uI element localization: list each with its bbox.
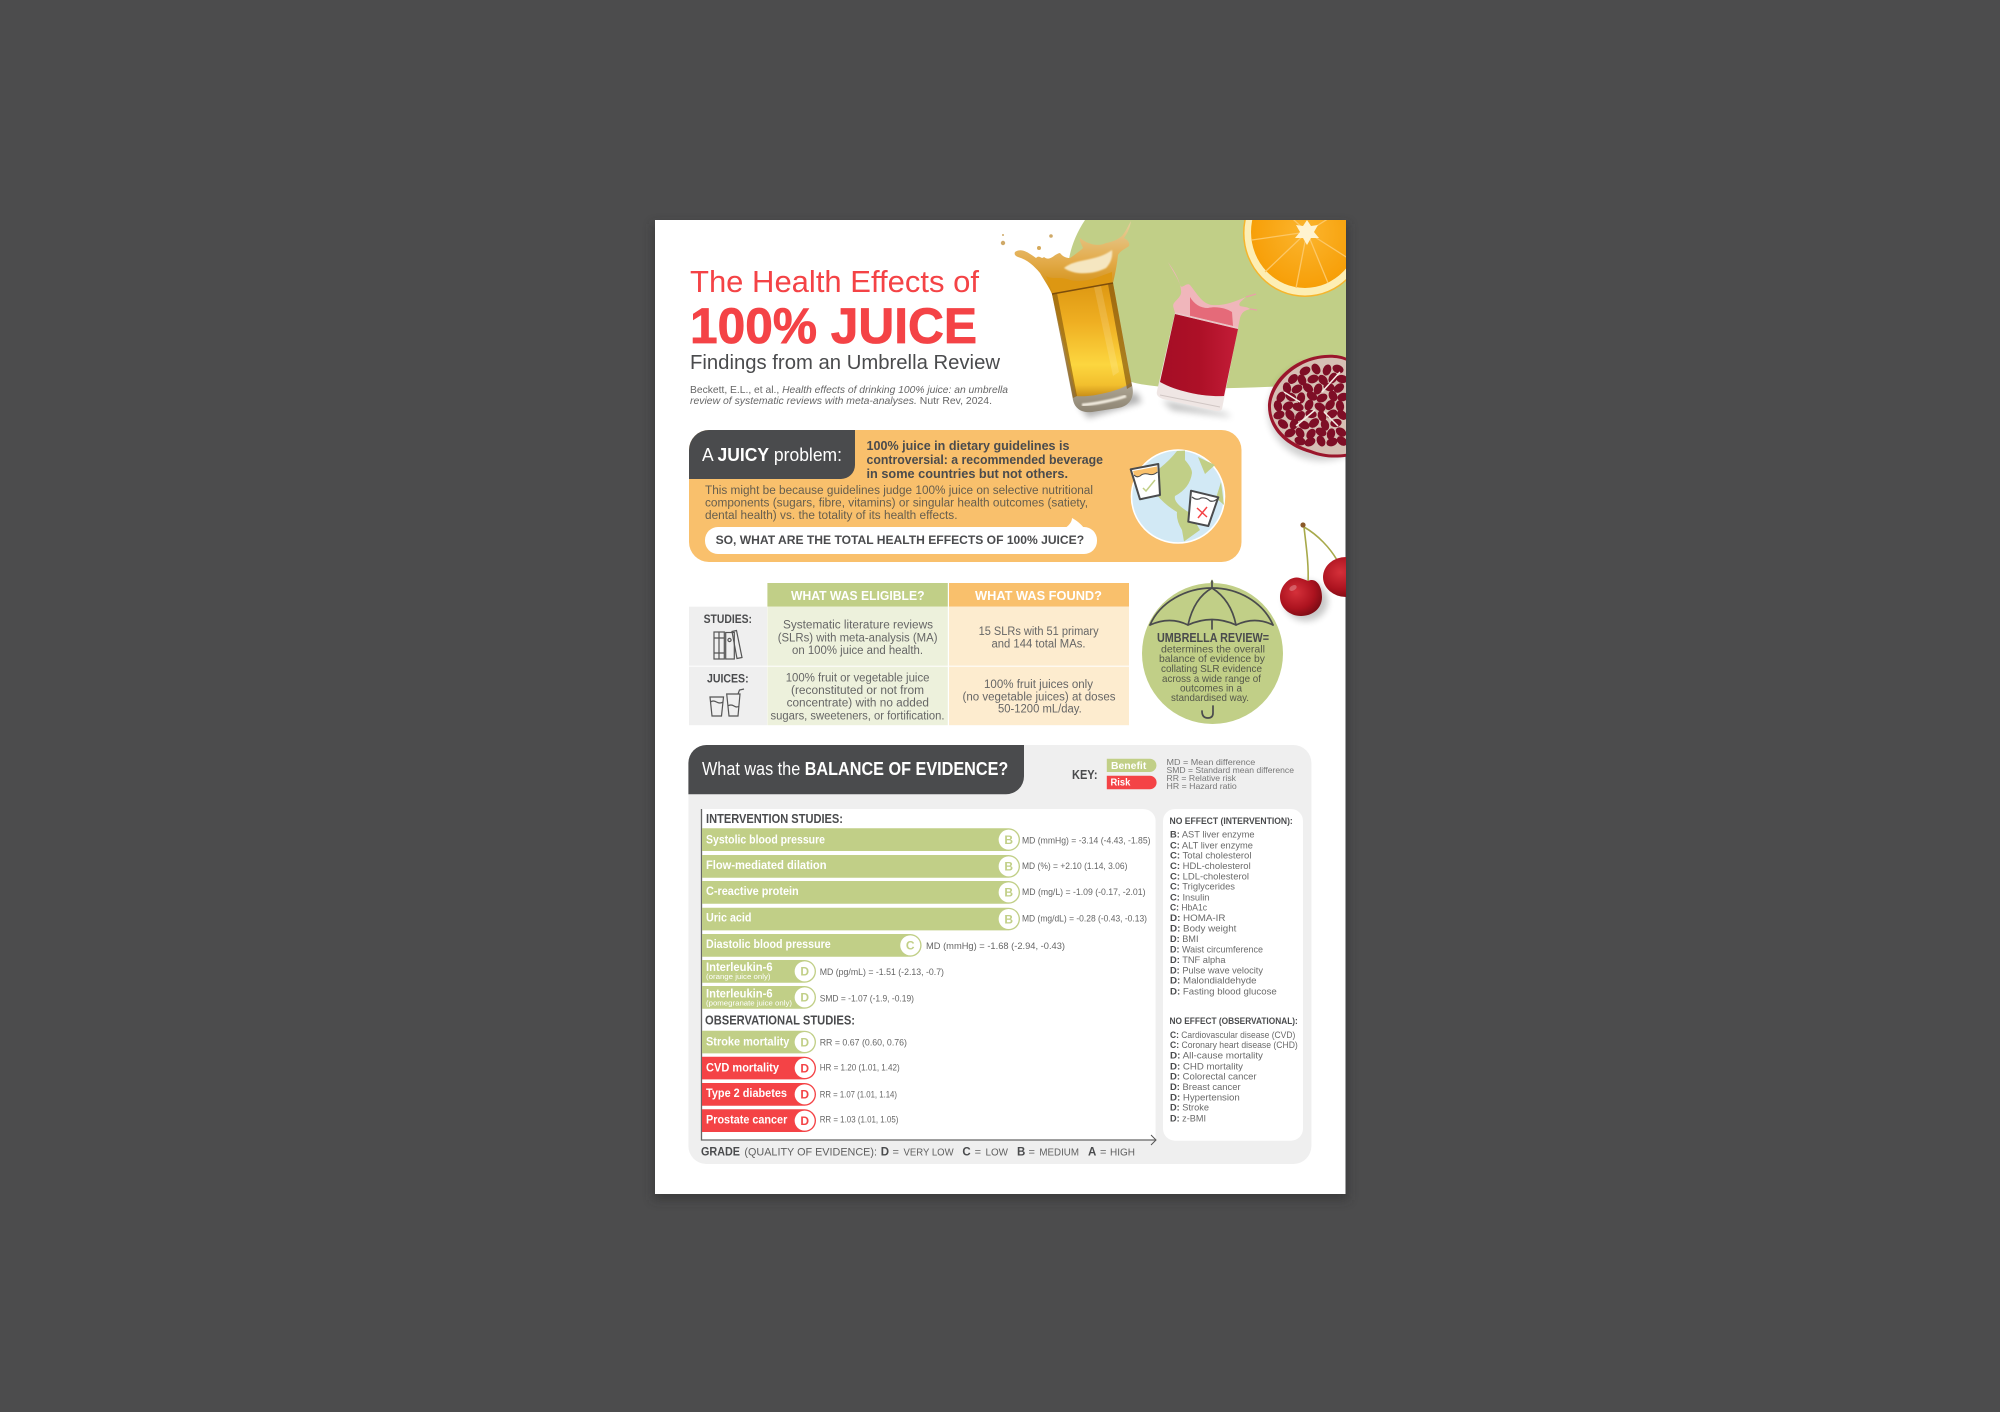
key statement: controversial: a recommended beverage <box>866 452 1103 467</box>
grade legend: MEDIUM <box>1039 1147 1079 1159</box>
grade legend: = <box>1028 1147 1035 1159</box>
bar: uric acid <box>702 908 1147 930</box>
hero artwork: juice and fruit <box>1001 169 1376 621</box>
cell: found juices <box>949 667 1129 725</box>
list: no effect intervention: NO EFFECT (INTERVENTION): <box>1170 816 1293 827</box>
explanation <box>705 485 1093 522</box>
key: Benefit <box>1111 760 1147 772</box>
list: no effect intervention: C: ALT liver enzyme <box>1170 840 1253 851</box>
cell: found studies <box>949 607 1129 666</box>
list: no effect intervention: D: Malondialdehyde <box>1170 976 1257 987</box>
key: HR = Hazard ratio <box>1166 781 1237 791</box>
cell: eligible juices <box>767 667 948 725</box>
umbrella definition: determines the overall <box>1161 643 1265 655</box>
cell: eligible studies: on 100% juice and health. <box>792 645 923 657</box>
green background blob <box>1067 220 1346 388</box>
bar: systolic: B <box>1004 833 1013 847</box>
citation: Beckett, E.L., et al., Health effects of drinking 100% juice: an umbrella <box>690 384 1008 396</box>
explanation: This might be because guidelines judge 100% juice on selective nutritional <box>705 485 1093 497</box>
umbrella definition: across a wide range of <box>1162 673 1261 685</box>
list: no effect intervention: D: Waist circumference <box>1170 944 1263 955</box>
grade legend: C <box>962 1147 971 1159</box>
umbrella definition: standardised way. <box>1171 692 1249 704</box>
bar: cvd mortality <box>702 1057 900 1079</box>
yellow juice glass <box>1001 221 1142 418</box>
header: eligible: WHAT WAS ELIGIBLE? <box>791 588 925 603</box>
bar: type 2 diabetes: Type 2 diabetes <box>706 1088 787 1100</box>
key: SMD = Standard mean difference <box>1166 765 1294 775</box>
orange slice <box>1243 220 1346 297</box>
cell: eligible studies <box>767 607 948 666</box>
subtitle: Findings from an Umbrella Review <box>690 352 1001 374</box>
bar: interleukin-6 pomegranate <box>702 986 914 1009</box>
list: no effect observational: D: z-BMI <box>1170 1113 1206 1124</box>
question bubble <box>705 518 1097 554</box>
grade legend: = <box>975 1147 981 1159</box>
list: no effect intervention: C: Insulin <box>1170 892 1210 903</box>
explanation: components (sugars, fibre, vitamins) or singular health outcomes (satiety, <box>705 498 1088 510</box>
bar: flow-mediated dilation: B <box>1004 860 1013 874</box>
bar: uric acid: B <box>1004 912 1013 926</box>
bar: interleukin-6 orange <box>702 960 944 983</box>
panel: juicy problem <box>689 430 1242 562</box>
cell: found juices: (no vegetable juices) at doses <box>962 691 1116 703</box>
row label: studies <box>689 607 767 666</box>
umbrella definition: UMBRELLA REVIEW= <box>1157 631 1269 645</box>
list: no effect intervention: D: TNF alpha <box>1170 955 1226 966</box>
list: no effect intervention: D: Fasting blood glucose <box>1170 986 1277 997</box>
heading text: What was the BALANCE OF EVIDENCE? <box>702 759 1008 779</box>
bar: stroke mortality: D <box>800 1035 809 1049</box>
header: eligible <box>767 583 948 607</box>
heading tab <box>689 430 855 479</box>
bar: prostate cancer: D <box>800 1114 809 1128</box>
list: no effect intervention: C: Total cholesterol <box>1170 850 1252 861</box>
bar: stroke mortality <box>702 1031 907 1053</box>
bar: diastolic: C <box>906 939 915 953</box>
list: no effect observational: NO EFFECT (OBSERVATIONAL): <box>1170 1016 1298 1027</box>
bar: diastolic: MD (mmHg) = -1.68 (-2.94, -0.43) <box>926 941 1065 952</box>
page shadow <box>653 224 1348 1200</box>
list: no effect intervention: D: HOMA-IR <box>1170 913 1226 924</box>
panel: umbrella review <box>1142 579 1283 724</box>
list: no effect observational: D: Colorectal cancer <box>1170 1071 1257 1082</box>
cell: found juices: 100% fruit juices only <box>984 679 1093 691</box>
title line 1: The Health Effects of <box>690 264 979 299</box>
list: no effect intervention: C: HbA1c <box>1170 902 1207 913</box>
heading: intervention: INTERVENTION STUDIES: <box>706 812 843 826</box>
list: no effect intervention: B: AST liver enzyme <box>1170 830 1254 841</box>
bar: c-reactive protein: MD (mg/L) = -1.09 (-0.17, -2.01) <box>1022 887 1146 898</box>
list: no effect observational: C: Coronary heart disease (CHD) <box>1170 1040 1298 1051</box>
row label: studies: STUDIES: <box>704 614 752 626</box>
bar: systolic: Systolic blood pressure <box>706 835 825 847</box>
title line 2: 100% JUICE <box>690 298 977 354</box>
grade legend: LOW <box>986 1147 1008 1159</box>
cell: eligible juices: concentrate) with no added <box>787 698 929 710</box>
bar: prostate cancer: RR = 1.03 (1.01, 1.05) <box>820 1115 898 1126</box>
bar: cvd mortality: HR = 1.20 (1.01, 1.42) <box>820 1063 900 1074</box>
icon: globe with glasses <box>1131 450 1224 543</box>
grade legend: = <box>892 1147 899 1159</box>
bar: interleukin-6 pomegranate: D <box>800 991 809 1005</box>
key: RR = Relative risk <box>1166 773 1237 783</box>
umbrella definition: outcomes in a <box>1180 683 1242 695</box>
grade legend: B <box>1017 1147 1025 1159</box>
cell: found studies: and 144 total MAs. <box>992 638 1086 650</box>
page sheet <box>655 220 1346 1194</box>
bar: type 2 diabetes: D <box>800 1088 809 1102</box>
bar: stroke mortality: Stroke mortality <box>706 1037 790 1049</box>
list: no effect intervention: D: Pulse wave velocity <box>1170 965 1263 976</box>
umbrella definition <box>1157 631 1269 704</box>
heading tab <box>688 745 1024 794</box>
list: no effect observational <box>1170 1016 1298 1124</box>
list: no effect observational: D: All-cause mortality <box>1170 1051 1263 1062</box>
key: Risk <box>1110 777 1130 789</box>
bar: cvd mortality: CVD mortality <box>706 1063 780 1075</box>
list: no effect intervention: C: Triglycerides <box>1170 882 1235 893</box>
bar: prostate cancer <box>702 1109 898 1132</box>
citation <box>690 384 1008 407</box>
bar: flow-mediated dilation: MD (%) = +2.10 (1.14, 3.06) <box>1022 861 1127 872</box>
list: no effect observational: C: Cardiovascular disease (CVD) <box>1170 1030 1295 1041</box>
list: no effect observational: D: CHD mortality <box>1170 1061 1243 1072</box>
bar: interleukin-6 pomegranate: Interleukin-6 <box>706 989 773 1001</box>
bar: type 2 diabetes: RR = 1.07 (1.01, 1.14) <box>820 1089 897 1100</box>
grade legend: D <box>881 1147 889 1159</box>
heading: observational: OBSERVATIONAL STUDIES: <box>705 1013 855 1027</box>
icon: glasses <box>710 689 744 716</box>
bar: systolic: MD (mmHg) = -3.14 (-4.43, -1.85) <box>1022 835 1150 846</box>
bar: prostate cancer: Prostate cancer <box>706 1114 788 1126</box>
cell: eligible juices: (reconstituted or not from <box>791 685 924 697</box>
question bubble: SO, WHAT ARE THE TOTAL HEALTH EFFECTS OF 100% JUICE? <box>716 533 1084 547</box>
list: no effect intervention: D: BMI <box>1170 934 1198 945</box>
cherries <box>1280 522 1346 624</box>
key statement: 100% juice in dietary guidelines is <box>866 438 1070 453</box>
bar: flow-mediated dilation <box>702 855 1127 878</box>
pomegranate <box>1265 354 1346 464</box>
icon: books <box>714 630 742 659</box>
list: no effect observational: D: Stroke <box>1170 1103 1209 1114</box>
bar: uric acid: Uric acid <box>706 913 752 925</box>
list: no effect intervention <box>1170 816 1293 997</box>
cell: found juices: 50-1200 mL/day. <box>998 704 1082 716</box>
explanation: dental health) vs. the totality of its health effects. <box>705 510 958 522</box>
grade legend: GRADE <box>701 1147 740 1159</box>
chart: effect bars <box>701 809 1156 1145</box>
bar: diastolic: Diastolic blood pressure <box>706 939 831 951</box>
bar: systolic <box>702 828 1150 851</box>
grade legend: VERY LOW <box>904 1147 954 1159</box>
list: no effect intervention: D: Body weight <box>1170 924 1237 935</box>
bar: interleukin-6 orange: (orange juice only) <box>706 974 770 981</box>
red juice glass <box>1157 262 1257 417</box>
grade legend: A <box>1088 1147 1096 1159</box>
row label: juices: JUICES: <box>707 674 749 686</box>
bar: c-reactive protein <box>702 881 1146 904</box>
row label: juices <box>689 667 767 725</box>
list: no effect intervention: C: LDL-cholesterol <box>1170 871 1249 882</box>
cell: eligible juices: 100% fruit or vegetable juice <box>786 673 930 685</box>
grade legend <box>701 1147 1135 1159</box>
grade legend: (QUALITY OF EVIDENCE): <box>744 1147 877 1159</box>
list: no effect observational: D: Hypertension <box>1170 1092 1240 1103</box>
heading text: A JUICY problem: <box>702 445 842 465</box>
key: MD = Mean difference <box>1166 757 1256 767</box>
umbrella definition: collating SLR evidence <box>1161 663 1262 675</box>
cell: found studies: 15 SLRs with 51 primary <box>979 626 1099 638</box>
bar: uric acid: MD (mg/dL) = -0.28 (-0.43, -0.13) <box>1022 913 1147 924</box>
title <box>690 264 1001 374</box>
bar: interleukin-6 orange: D <box>800 965 809 979</box>
bar: c-reactive protein: B <box>1004 886 1013 900</box>
key: KEY: <box>1072 768 1098 782</box>
cell: eligible juices: sugars, sweeteners, or fortification. <box>770 710 944 722</box>
bar: interleukin-6 pomegranate: (pomegranate juice only) <box>706 1001 792 1008</box>
bar: interleukin-6 orange: Interleukin-6 <box>706 962 773 974</box>
header: found <box>949 583 1129 607</box>
bar: diastolic <box>702 934 1065 957</box>
citation: review of systematic reviews with meta-analyses. Nutr Rev, 2024. <box>690 395 992 407</box>
cell: eligible studies: (SLRs) with meta-analysis (MA) <box>778 633 938 645</box>
bar: type 2 diabetes <box>702 1083 897 1106</box>
panel: balance of evidence <box>688 745 1311 1164</box>
bar: stroke mortality: RR = 0.67 (0.60, 0.76) <box>820 1038 907 1049</box>
list: no effect intervention: C: HDL-cholesterol <box>1170 861 1251 872</box>
table: eligibility and findings <box>689 583 1129 725</box>
bar: flow-mediated dilation: Flow-mediated dilation <box>706 860 826 872</box>
bar: c-reactive protein: C-reactive protein <box>706 886 799 898</box>
list: no effect observational: D: Breast cancer <box>1170 1082 1241 1093</box>
panel: no effect lists <box>1163 809 1303 1141</box>
grade legend: HIGH <box>1110 1147 1135 1159</box>
cell: eligible studies: Systematic literature reviews <box>783 620 933 632</box>
key statement: in some countries but not others. <box>866 466 1068 481</box>
grade legend: = <box>1100 1147 1106 1159</box>
bar: cvd mortality: D <box>800 1061 809 1075</box>
bar: interleukin-6 pomegranate: SMD = -1.07 (-1.9, -0.19) <box>820 993 914 1004</box>
key statement <box>866 438 1103 481</box>
key <box>1072 757 1294 791</box>
bar: interleukin-6 orange: MD (pg/mL) = -1.51 (-2.13, -0.7) <box>820 967 944 978</box>
umbrella definition: balance of evidence by <box>1159 653 1266 665</box>
header: found: WHAT WAS FOUND? <box>975 588 1102 603</box>
icon: umbrella <box>1150 581 1273 718</box>
